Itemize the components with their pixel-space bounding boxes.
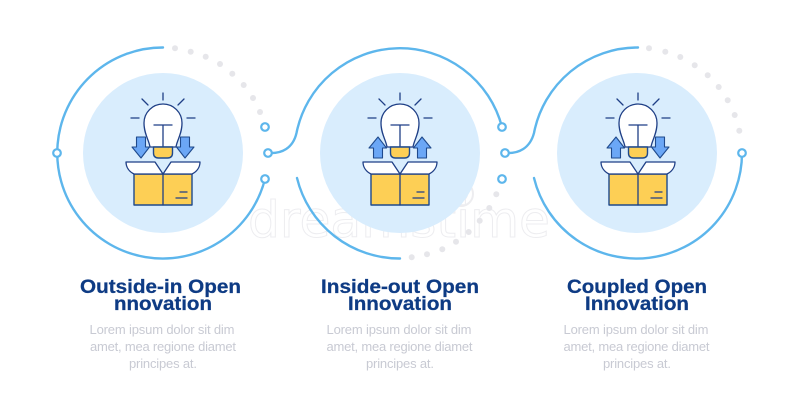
- ring 2 upper arc and connector: [268, 48, 502, 153]
- icon: light bulb with up and down arrows: [601, 93, 675, 205]
- heading 2: Inside-out Open: [321, 277, 479, 298]
- background circle 2: [320, 73, 480, 233]
- ring nodes 3: [501, 149, 746, 157]
- icon: light bulb going into box: [126, 93, 200, 205]
- dotted arc 3: [646, 45, 742, 134]
- background circle 3: [557, 73, 717, 233]
- description 3: Lorem ipsum dolor sit dim: [564, 322, 708, 337]
- description 1: Lorem ipsum dolor sit dim: [90, 322, 234, 337]
- heading 2 line 2: Innovation: [348, 294, 452, 315]
- ring nodes 2: [264, 123, 506, 183]
- description 2: amet, mea regione diamet: [326, 339, 473, 354]
- panel: coupled open innovation: [501, 45, 746, 371]
- panel: outside-in open innovation: [53, 45, 269, 371]
- watermark: dreamstime: [248, 191, 550, 249]
- ring nodes 1: [53, 123, 269, 183]
- description 3: [564, 322, 710, 371]
- description 3: principes at.: [603, 356, 671, 371]
- ring 1: [57, 47, 265, 258]
- dotted arc 2: [409, 191, 499, 260]
- dotted arc 1: [172, 45, 263, 115]
- description 2: Lorem ipsum dolor sit dim: [326, 322, 472, 337]
- icon: light bulb coming out of box: [363, 93, 437, 205]
- heading 1 line 2: nnovation: [114, 294, 212, 315]
- ring 2 lower arc: [297, 178, 400, 259]
- heading 1: Outside-in Open: [80, 277, 241, 298]
- description 2: principes at.: [366, 356, 434, 371]
- description 1: [90, 322, 236, 371]
- ring 3 lower arc: [534, 153, 742, 259]
- heading 3 line 2: Innovation: [585, 294, 689, 315]
- heading 3: Coupled Open: [567, 277, 707, 298]
- panel: inside-out open innovation: [264, 48, 506, 371]
- ring 3 upper arc and connector: [505, 47, 638, 153]
- description 1: principes at.: [129, 356, 197, 371]
- description 1: amet, mea regione diamet: [90, 339, 236, 354]
- description 2: [326, 322, 473, 371]
- background circle 1: [83, 73, 243, 233]
- description 3: amet, mea regione diamet: [564, 339, 710, 354]
